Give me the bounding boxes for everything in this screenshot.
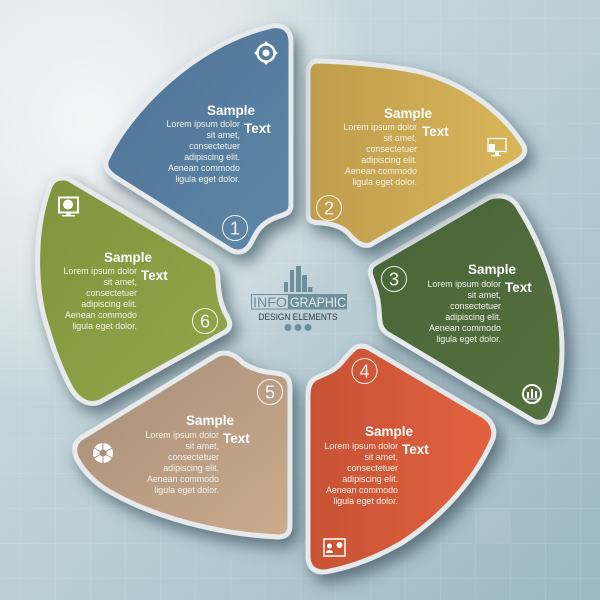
number 1: [222, 216, 248, 240]
panel 2: yellow: [308, 61, 525, 245]
body text 6: adipiscing elit.: [81, 299, 137, 309]
logo: infographic: [252, 294, 347, 310]
heading 3: Sample: [468, 262, 517, 277]
number 5: [258, 380, 282, 404]
heading 5: Sample: [186, 413, 235, 428]
panel 4: red: [308, 346, 494, 572]
icon: monitor with pie: [59, 198, 78, 216]
number 4: [352, 358, 377, 384]
heading 1: Text: [244, 121, 271, 136]
body text 5: ligula eget dolor.: [154, 485, 219, 495]
body text 1: consectetuer: [189, 141, 240, 151]
body text 3: ligula eget dolor.: [436, 334, 501, 344]
number 1: 1: [230, 218, 240, 238]
body text 3: Aenean commodo: [429, 323, 501, 333]
body text 1: ligula eget dolor.: [175, 174, 240, 184]
logo: infographic: GRAPHIC: [290, 294, 346, 310]
icon: presentation board: [324, 539, 345, 556]
panel 1: blue: [106, 26, 291, 252]
panel 3: dark green: [370, 196, 562, 422]
body text 5: adipiscing elit.: [163, 463, 219, 473]
number 6: 6: [200, 312, 210, 332]
center logo: [252, 266, 347, 331]
number 6: [192, 308, 218, 334]
body text 2: Lorem ipsum dolor: [344, 122, 417, 132]
three dots: [284, 324, 312, 331]
icon: bar chart: [284, 266, 312, 292]
body text 4: adipiscing elit.: [342, 474, 398, 484]
heading 3: Text: [505, 280, 532, 295]
number 3: [382, 266, 406, 292]
number 4: 4: [359, 362, 370, 382]
body text 2: ligula eget dolor.: [352, 177, 417, 187]
body text 4: Lorem ipsum dolor: [324, 441, 398, 451]
number 2: [316, 196, 342, 220]
body text 4: sit amet,: [364, 452, 398, 462]
body text 5: Aenean commodo: [147, 474, 219, 484]
body text 1: Aenean commodo: [168, 163, 240, 173]
body text 5: consectetuer: [168, 452, 219, 462]
heading 2: Sample: [384, 106, 433, 121]
body text 3: sit amet,: [467, 290, 501, 300]
heading 5: Text: [223, 431, 250, 446]
body text 2: sit amet,: [383, 133, 417, 143]
body text 3: adipiscing elit.: [445, 312, 501, 322]
subtitle: DESIGN ELEMENTS: [258, 312, 338, 323]
body text 1: Lorem ipsum dolor: [166, 119, 240, 129]
body text 6: Aenean commodo: [65, 310, 137, 320]
body text 4: consectetuer: [347, 463, 398, 473]
number 2: 2: [324, 198, 334, 218]
body text 3: consectetuer: [450, 301, 501, 311]
body text 3: Lorem ipsum dolor: [428, 279, 501, 289]
heading 6: Sample: [104, 250, 153, 265]
icon: circular arrows: [254, 41, 278, 65]
body text 6: sit amet,: [103, 277, 137, 287]
panel 6: green: [38, 178, 230, 404]
body text 1: sit amet,: [206, 130, 240, 140]
icon: camera aperture: [93, 443, 113, 463]
heading 6: Text: [141, 268, 168, 283]
number 5: 5: [265, 382, 275, 402]
body text 1: adipiscing elit.: [184, 152, 240, 162]
number 3: 3: [389, 270, 399, 290]
body text 2: consectetuer: [366, 144, 417, 154]
heading 4: Sample: [365, 424, 414, 439]
logo: infographic: INFO: [253, 294, 287, 310]
heading 4: Text: [402, 442, 429, 457]
body text 6: consectetuer: [86, 288, 137, 298]
icon: round chart: [523, 385, 541, 403]
heading 1: Sample: [207, 103, 256, 118]
body text 5: Lorem ipsum dolor: [146, 430, 219, 440]
heading 2: Text: [422, 124, 449, 139]
body text 5: sit amet,: [185, 441, 219, 451]
body text 2: Aenean commodo: [345, 166, 417, 176]
icon: monitor with bars: [488, 138, 506, 156]
body text 6: ligula eget dolor.: [72, 321, 137, 331]
body text 6: Lorem ipsum dolor: [64, 266, 137, 276]
body text 4: ligula eget dolor.: [333, 496, 398, 506]
body text 2: adipiscing elit.: [361, 155, 417, 165]
panel 5: tan: [75, 353, 290, 537]
body text 4: Aenean commodo: [326, 485, 398, 495]
